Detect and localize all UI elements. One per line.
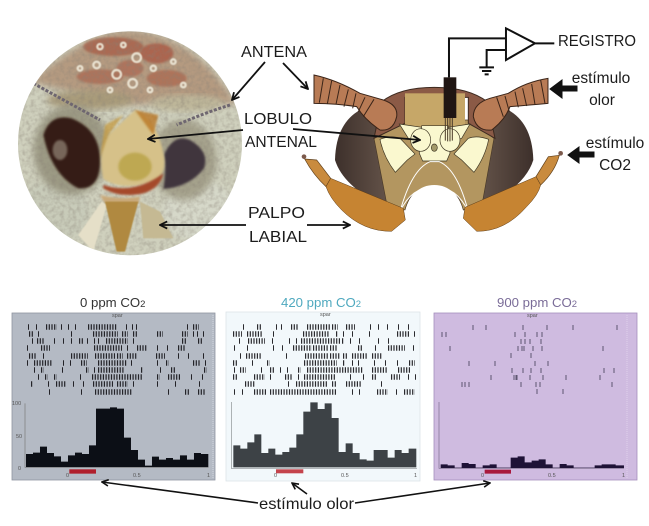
panel: 900 ppm CO2 — [434, 295, 637, 480]
axis labels: 0 — [66, 473, 69, 479]
axis labels: 100 — [12, 401, 21, 407]
title: 900 ppm: 900 ppm CO2 — [497, 295, 577, 310]
axis labels: 0.5 — [133, 473, 141, 479]
label: estímulo olor: olor — [589, 92, 615, 109]
axis labels — [481, 473, 625, 479]
histogram — [232, 402, 417, 473]
label: estímulo olor bottom: estímulo olor — [259, 496, 355, 513]
axis labels: 0.5 — [548, 473, 556, 479]
right labial palp — [463, 151, 563, 231]
arrow: CO2 stimulus — [568, 147, 594, 163]
central lobe — [101, 110, 164, 186]
title: 420 ppm: 420 ppm CO2 — [281, 295, 361, 310]
raster plot — [233, 327, 416, 392]
compound eyes — [335, 110, 533, 212]
head crown — [374, 87, 495, 138]
head diagram — [302, 28, 563, 243]
antennal lobes — [380, 124, 489, 172]
raster plot — [27, 327, 207, 392]
axis labels: 0 — [18, 466, 21, 472]
raster plot — [442, 325, 617, 394]
scale beads — [78, 43, 186, 92]
label: PALPO LABIAL: PALPO — [248, 205, 305, 222]
label: estímulo CO2: CO2 — [599, 157, 631, 174]
left antenna — [314, 75, 397, 130]
histogram — [25, 403, 208, 474]
panel: 0 ppm CO2 — [12, 295, 215, 480]
label: REGISTRO: REGISTRO — [558, 33, 636, 50]
histogram — [439, 402, 624, 474]
stimulus bar — [485, 470, 511, 474]
bottom notch — [400, 162, 468, 212]
antenna strand — [33, 83, 230, 125]
axis labels: 0 — [481, 473, 484, 479]
label: estímulo CO2: estímulo — [586, 135, 644, 152]
axis labels: 1 — [622, 473, 625, 479]
label: LOBULO ANTENAL: ANTENAL — [245, 134, 317, 151]
eyes — [43, 117, 100, 188]
amplifier circuit — [449, 28, 554, 77]
panel: 900 ppm CO2: spar — [527, 313, 538, 319]
axis labels: 50 — [16, 434, 22, 440]
stimulus bar — [276, 469, 303, 473]
photo: mosquito head micrograph — [18, 31, 242, 256]
recording electrode — [444, 77, 456, 141]
axis labels: 0 — [274, 473, 277, 479]
axis labels: 1 — [414, 473, 417, 479]
arrows: odor stimulus markers — [102, 482, 490, 503]
label: estímulo olor: estímulo — [572, 70, 630, 87]
axis labels: 1 — [207, 473, 210, 479]
panel: 420 ppm CO2: spar — [320, 312, 331, 318]
right antenna — [473, 78, 548, 130]
axis labels: 0.5 — [341, 473, 349, 479]
stimulus bar — [69, 469, 96, 474]
label: PALPO LABIAL: LABIAL — [249, 229, 307, 246]
arrow: odor stimulus — [550, 80, 577, 98]
head capsule — [374, 120, 494, 210]
title: 0 ppm: 0 ppm CO2 — [80, 295, 145, 310]
left labial palp — [302, 154, 405, 231]
axis labels — [12, 401, 210, 479]
panel: 0 ppm CO2: spar — [112, 313, 123, 319]
labial palps — [78, 202, 107, 252]
axis labels — [274, 473, 417, 479]
arrows: top labels — [148, 62, 420, 225]
label: LOBULO ANTENAL: LOBULO — [244, 111, 312, 128]
panel: 420 ppm CO2 — [226, 295, 420, 481]
label: ANTENA: ANTENA — [241, 44, 308, 61]
